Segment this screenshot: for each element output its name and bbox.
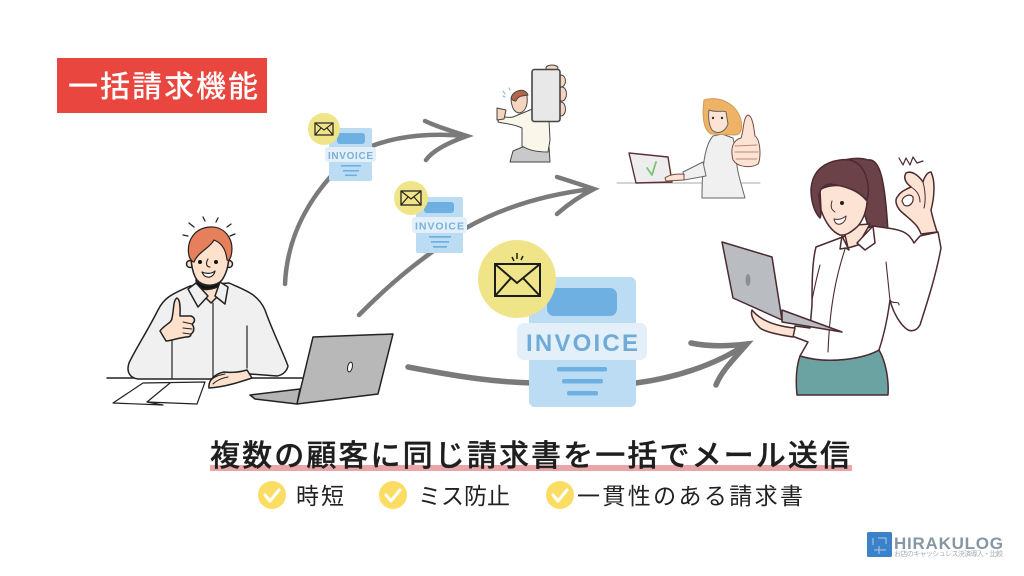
resting hand (209, 370, 252, 388)
surprise marks (183, 217, 235, 236)
logo: HIRAKULOG: お店のキャッシュレス決済導入・比較 (894, 549, 1003, 558)
heading with underline: 複数の顧客に同じ請求書を一括でメール送信 (210, 440, 850, 473)
illustration: main woman with laptop and OK sign (722, 157, 941, 395)
title badge: 一括請求機能 (68, 71, 258, 104)
invoice icon small 1: INVOICE (328, 151, 373, 162)
laptop (250, 389, 300, 404)
thumbs up hand (160, 298, 194, 341)
invoice icon large: INVOICE (526, 330, 638, 357)
holding hand (752, 310, 795, 337)
illustration: woman at laptop thumbs up (617, 99, 760, 198)
shirt (128, 283, 288, 379)
invoice icon small 2: INVOICE (415, 220, 464, 232)
OK hand (896, 172, 937, 234)
benefit: time saving (258, 481, 344, 509)
arrow: to main customer (408, 343, 747, 385)
arrow: to laptop customer (359, 177, 594, 315)
benefit: time saving: 時短 (296, 483, 344, 509)
laptop (782, 310, 842, 332)
benefit: error prevention: ミス防止 (418, 483, 510, 509)
invoice icon small 1 (308, 113, 376, 181)
skirt (796, 350, 888, 395)
neck (196, 278, 222, 303)
ponytail hair back (813, 158, 888, 232)
shirt (792, 226, 941, 360)
logo: HIRAKULOG: HIRAKULOG (894, 534, 1003, 553)
benefit: error prevention (379, 481, 510, 509)
neck and collar (843, 224, 870, 248)
papers (113, 382, 205, 405)
benefit: consistent invoices: 一貫性のある請求書 (577, 483, 803, 509)
front hair (811, 160, 868, 218)
hair (188, 227, 232, 262)
illustration: man holding phone (497, 65, 566, 162)
invoice icon small 2 (394, 181, 467, 253)
logo: HIRAKULOG (867, 532, 1003, 558)
invoice icon large (478, 240, 647, 407)
title badge (57, 58, 267, 113)
arrow: to phone customer (285, 121, 467, 284)
illustration: man at desk with laptop (107, 217, 393, 405)
head (186, 260, 194, 268)
face (820, 186, 867, 235)
